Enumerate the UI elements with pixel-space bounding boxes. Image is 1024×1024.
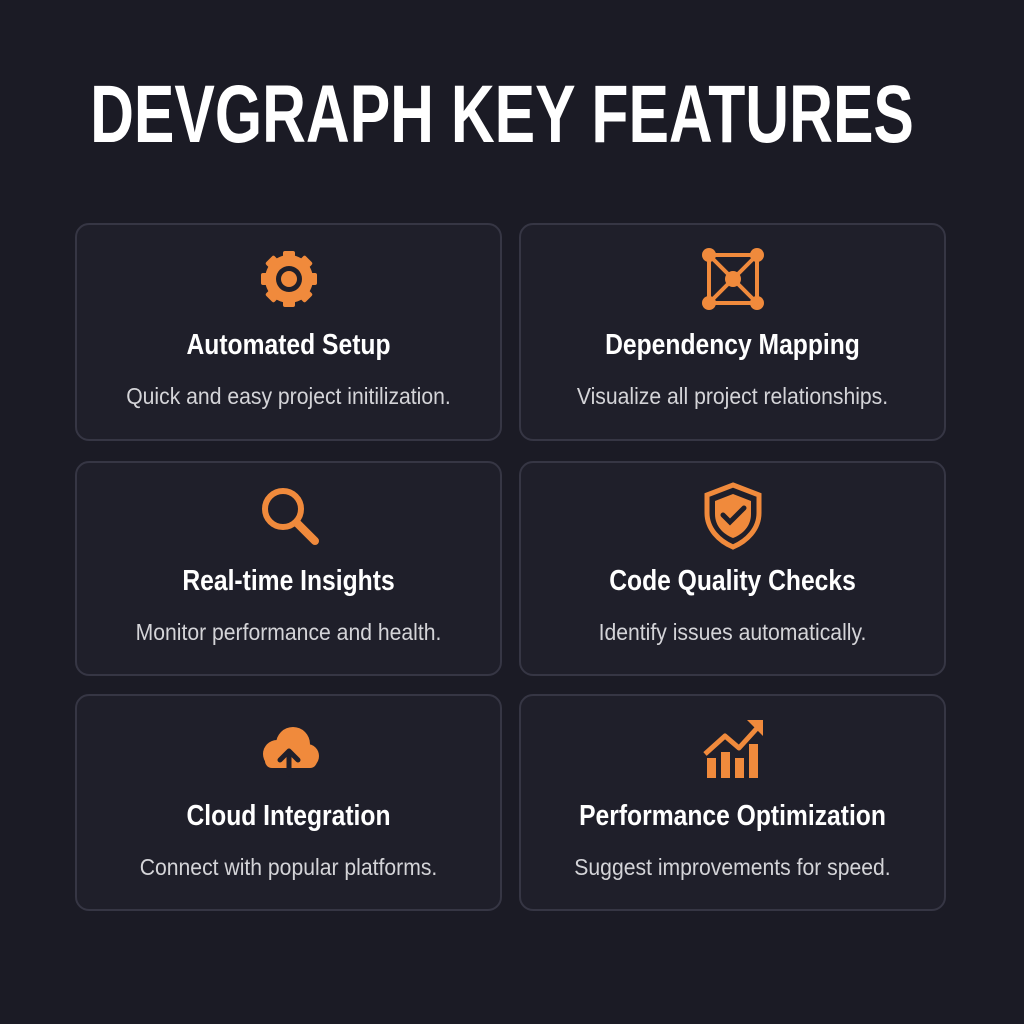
heading: Dependency Mapping	[605, 329, 860, 361]
heading: Real-time Insights	[182, 565, 395, 597]
title: DEVGRAPH KEY FEATURES	[90, 69, 914, 160]
icon: shield	[704, 482, 762, 550]
panel: automated setup	[75, 223, 502, 441]
description: Visualize all project relationships.	[577, 383, 888, 409]
description: Suggest improvements for speed.	[574, 854, 891, 880]
panel: performance optimization	[519, 694, 946, 911]
description: Monitor performance and health.	[136, 619, 441, 645]
icon: magnifier	[262, 488, 319, 545]
panel: code quality checks	[519, 461, 946, 676]
heading: Code Quality Checks	[609, 565, 856, 597]
description: Identify issues automatically.	[599, 619, 866, 645]
icon: graph	[702, 248, 764, 310]
heading: Automated Setup	[186, 329, 391, 361]
description: Quick and easy project initilization.	[126, 383, 451, 409]
panel: cloud integration	[75, 694, 502, 911]
panel: dependency mapping	[519, 223, 946, 441]
panel: real-time insights	[75, 461, 502, 676]
heading: Cloud Integration	[186, 800, 391, 832]
heading: Performance Optimization	[579, 800, 886, 832]
description: Connect with popular platforms.	[140, 854, 437, 880]
icon: gear	[261, 251, 317, 307]
icon: cloud upload	[263, 727, 319, 768]
icon: growth chart	[703, 720, 763, 778]
